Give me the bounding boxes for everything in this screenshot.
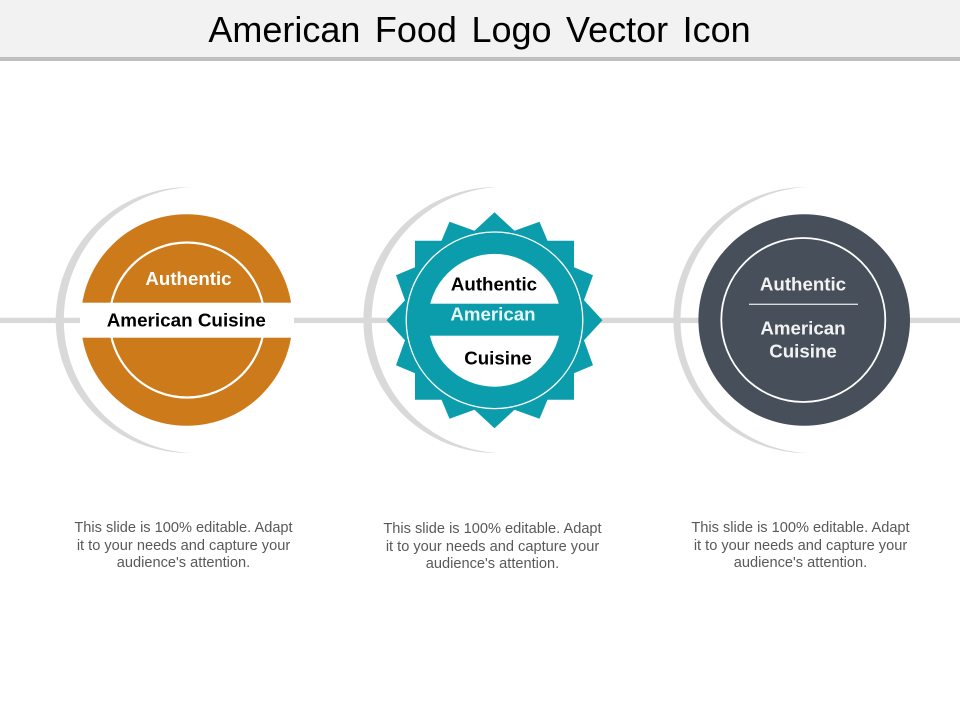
inner ring: [110, 242, 264, 398]
crescent: teal badge: [363, 187, 498, 453]
white centre disc: [428, 254, 561, 387]
caption: right: it to your needs and capture your: [694, 538, 907, 554]
thin ring: [406, 232, 583, 409]
label: American: American: [450, 304, 536, 324]
teal starburst: [386, 212, 602, 428]
caption: left: it to your needs and capture your: [77, 538, 290, 554]
connector line: [0, 318, 960, 323]
label: Authentic: Authentic: [145, 268, 232, 289]
white band: [80, 303, 294, 338]
panel: teal badge: [363, 187, 602, 453]
inner ring: [721, 238, 885, 402]
panel: slate badge: [673, 187, 910, 453]
teal band: [425, 304, 565, 336]
label: Authentic: Authentic: [451, 274, 537, 294]
label: American Cuisine: American: [760, 318, 846, 338]
caption: left: audience's attention.: [117, 555, 250, 571]
label: Authentic: Authentic: [760, 274, 846, 294]
slate disc: [698, 214, 910, 426]
crescent: slate badge: [673, 187, 808, 453]
caption: middle: audience's attention.: [426, 556, 559, 572]
orange disc: [81, 214, 292, 426]
caption: left: This slide is 100% editable. Adapt: [74, 520, 293, 536]
caption: right: audience's attention.: [734, 555, 867, 571]
title bar: [0, 0, 960, 61]
caption: middle: This slide is 100% editable. Adapt: [383, 521, 602, 537]
caption: middle: it to your needs and capture your: [386, 539, 599, 555]
panel: orange badge: [56, 187, 294, 453]
crescent: orange badge: [56, 187, 192, 453]
caption: right: This slide is 100% editable. Adapt: [691, 520, 910, 536]
title: American Food Logo Vector Icon: [208, 9, 751, 50]
divider: [749, 304, 858, 305]
label: American Cuisine: Cuisine: [769, 340, 837, 362]
label: American Cuisine: American Cuisine: [107, 310, 266, 330]
label: Cuisine: Cuisine: [464, 348, 532, 368]
